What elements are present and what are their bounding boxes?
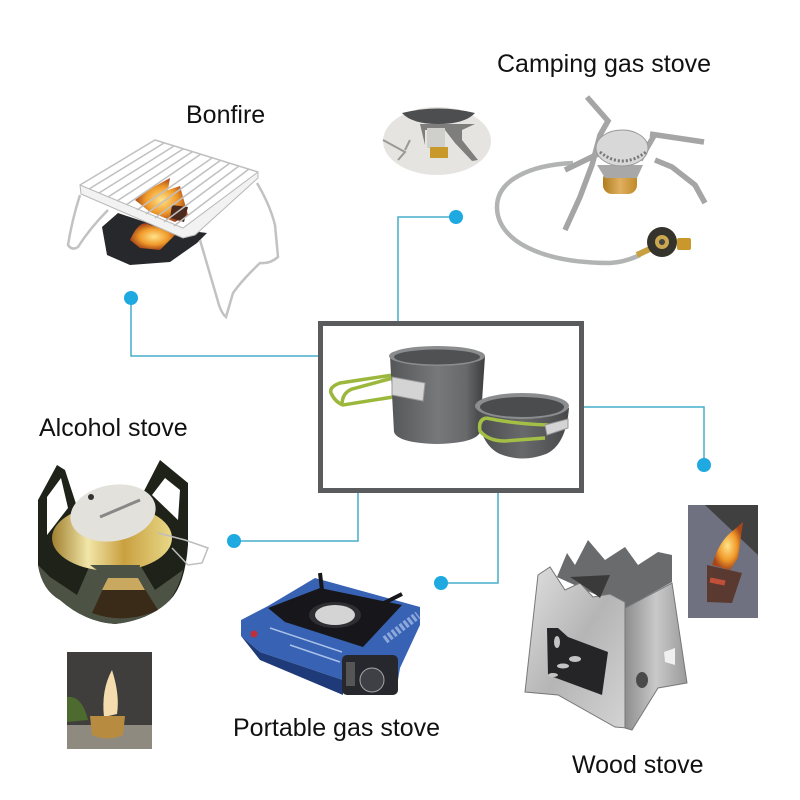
heading: Alcohol stove: Alcohol stove xyxy=(39,414,188,442)
photo: wood stove fire xyxy=(688,505,758,618)
connector: camping gas stove xyxy=(398,210,463,321)
icon: green pot handle xyxy=(331,375,393,405)
icon: pot xyxy=(389,346,485,444)
heading: Camping gas stove: Camping gas stove xyxy=(497,50,711,78)
central panel: cookware xyxy=(320,324,582,490)
connector: wood stove xyxy=(584,407,711,472)
connector: alcohol stove xyxy=(227,492,358,548)
icon: bowl xyxy=(475,393,569,458)
heading: Portable gas stove: Portable gas stove xyxy=(233,714,440,742)
heading: Wood stove: Wood stove xyxy=(572,751,704,779)
icon: wood stove xyxy=(525,540,687,730)
connector: bonfire xyxy=(124,291,318,356)
icon: alcohol stove xyxy=(38,460,208,624)
icon: bonfire grill xyxy=(68,140,278,317)
heading: Bonfire: Bonfire xyxy=(186,101,265,129)
photo: camping stove in use xyxy=(383,107,491,175)
connector: portable gas stove xyxy=(434,492,498,590)
photo: alcohol stove flame xyxy=(67,652,152,749)
icon: camping gas stove xyxy=(497,97,705,263)
icon: portable gas stove xyxy=(241,573,420,695)
